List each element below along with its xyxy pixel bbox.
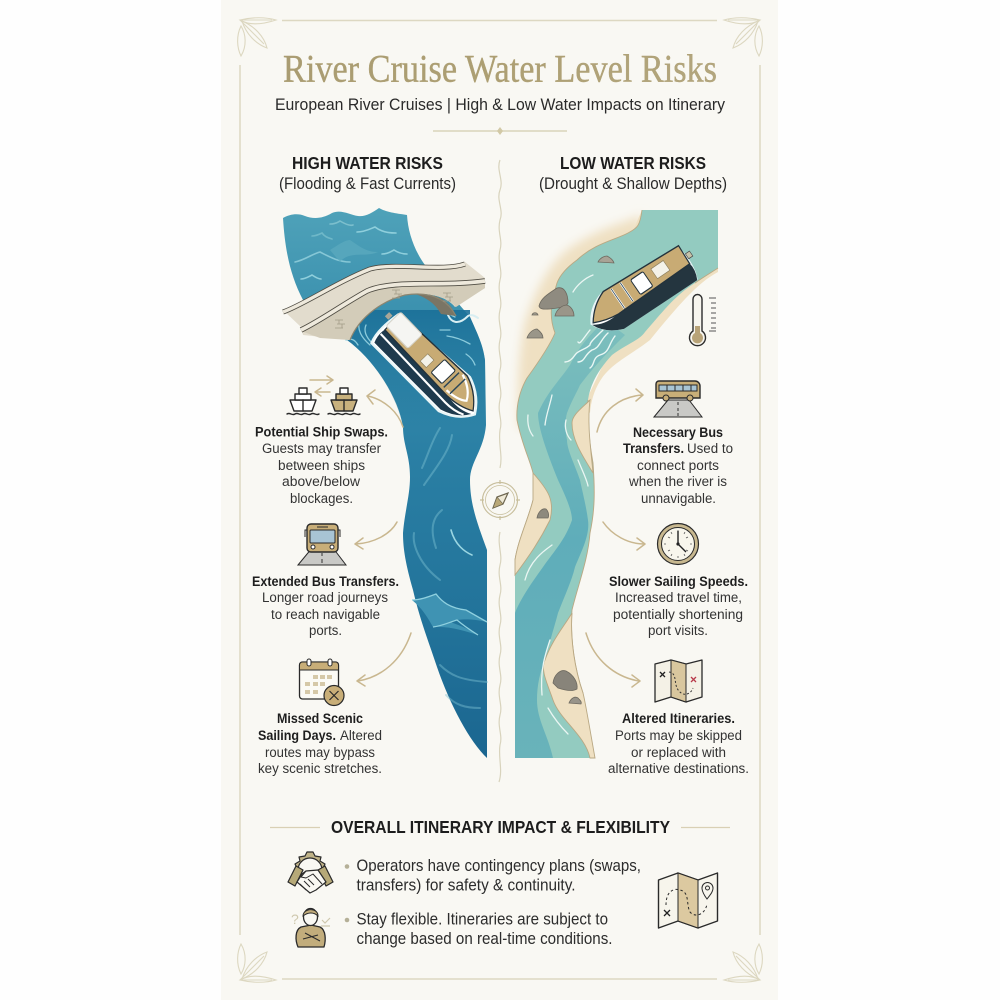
icon: calendar with cross: [300, 659, 344, 706]
text: missed scenic sailing days: Sailing Days.: [258, 728, 336, 743]
text: extended bus transfers: ports.: [309, 623, 342, 638]
text: extended bus transfers: Longer road journeys: [262, 590, 388, 605]
bullet: stay flexible: Stay flexible. Itineraries are subject to: [356, 910, 608, 928]
icon: bus side on road: [654, 381, 702, 417]
text: necessary bus transfers: [623, 425, 733, 506]
icon: compass: [480, 480, 520, 520]
text: slower sailing speeds: [609, 574, 748, 638]
central wavy divider: [499, 160, 501, 782]
illustration: stone bridge: [283, 262, 485, 340]
icon: clock: [658, 524, 698, 564]
text: necessary bus transfers: unnavigable.: [641, 491, 716, 506]
text: potential ship swaps: blockages.: [290, 491, 353, 506]
text: necessary bus transfers: Transfers.: [623, 441, 684, 456]
decorative frame with corner leaves: [238, 18, 762, 982]
text: necessary bus transfers: connect ports: [637, 458, 719, 473]
text: slower sailing speeds: Slower Sailing Speeds.: [609, 574, 748, 589]
bullet: contingency plans: transfers) for safety & continuity.: [356, 876, 576, 894]
bullet: contingency plans: [345, 857, 641, 894]
bullet: stay flexible: [345, 910, 612, 948]
text: necessary bus transfers: when the river is: [628, 474, 727, 489]
heading: high water risks: (Flooding & Fast Currents): [279, 175, 456, 193]
illustration: cruise ship in flood: [365, 303, 491, 432]
icon: bus front on road: [298, 524, 346, 565]
icon: thermometer: [690, 294, 716, 346]
icon: flexible person: [291, 908, 330, 947]
text: potential ship swaps: [255, 424, 388, 506]
text: slower sailing speeds: Increased travel time,: [615, 590, 742, 605]
subtitle: European River Cruises | High & Low Water Impacts on Itinerary: [275, 96, 726, 114]
text: slower sailing speeds: potentially shortening: [613, 607, 743, 622]
text: missed scenic sailing days: routes may bypass: [265, 745, 375, 760]
text: altered itineraries: alternative destinations.: [608, 761, 749, 776]
bullet: contingency plans: Operators have contingency plans (swaps,: [356, 857, 641, 875]
text: necessary bus transfers: Used to: [687, 441, 733, 456]
arrows from rivers to risk icons: [355, 389, 645, 687]
text: potential ship swaps: between ships: [278, 458, 365, 473]
icon: route map with pin: [658, 873, 718, 928]
panel: cream page background: [221, 0, 778, 1000]
icon: flexible person: ?: [291, 911, 299, 927]
text: altered itineraries: Altered Itineraries.: [622, 711, 735, 726]
heading: high water risks: HIGH WATER RISKS: [292, 153, 443, 173]
illustration: high water river: [283, 208, 487, 758]
heading: low water risks: [539, 153, 727, 193]
text: missed scenic sailing days: key scenic stretches.: [258, 761, 382, 776]
icon: handshake and gear: [288, 852, 333, 893]
heading: high water risks: [279, 153, 456, 193]
text: missed scenic sailing days: [258, 711, 382, 776]
text: altered itineraries: Ports may be skipped: [615, 728, 742, 743]
illustration: cruise ship in shallows: [580, 238, 705, 343]
text: altered itineraries: or replaced with: [631, 745, 726, 760]
icon: altered map: [655, 660, 702, 702]
text: potential ship swaps: above/below: [282, 474, 360, 489]
title divider: [433, 127, 567, 135]
text: potential ship swaps: Potential Ship Swaps.: [255, 424, 388, 440]
icon: ship swaps: [287, 376, 360, 415]
bullet: stay flexible: change based on real-time conditions.: [356, 930, 612, 948]
text: extended bus transfers: to reach navigable: [271, 607, 380, 622]
heading: overall impact: OVERALL ITINERARY IMPACT & FLEXIBILITY: [331, 817, 670, 837]
text: extended bus transfers: [252, 574, 399, 638]
text: extended bus transfers: Extended Bus Transfers.: [252, 574, 399, 589]
text: missed scenic sailing days: Missed Scenic: [277, 711, 363, 726]
text: potential ship swaps: Guests may transfer: [262, 441, 381, 456]
rocks and sand details: [527, 256, 614, 704]
title: River Cruise Water Level Risks: [283, 46, 717, 90]
illustration: low water river: [515, 210, 718, 758]
text: missed scenic sailing days: Altered: [340, 728, 382, 743]
text: slower sailing speeds: port visits.: [648, 623, 708, 638]
heading: low water risks: LOW WATER RISKS: [560, 153, 706, 173]
heading: low water risks: (Drought & Shallow Depths): [539, 175, 727, 193]
text: altered itineraries: [608, 711, 749, 776]
text: necessary bus transfers: Necessary Bus: [633, 425, 723, 440]
